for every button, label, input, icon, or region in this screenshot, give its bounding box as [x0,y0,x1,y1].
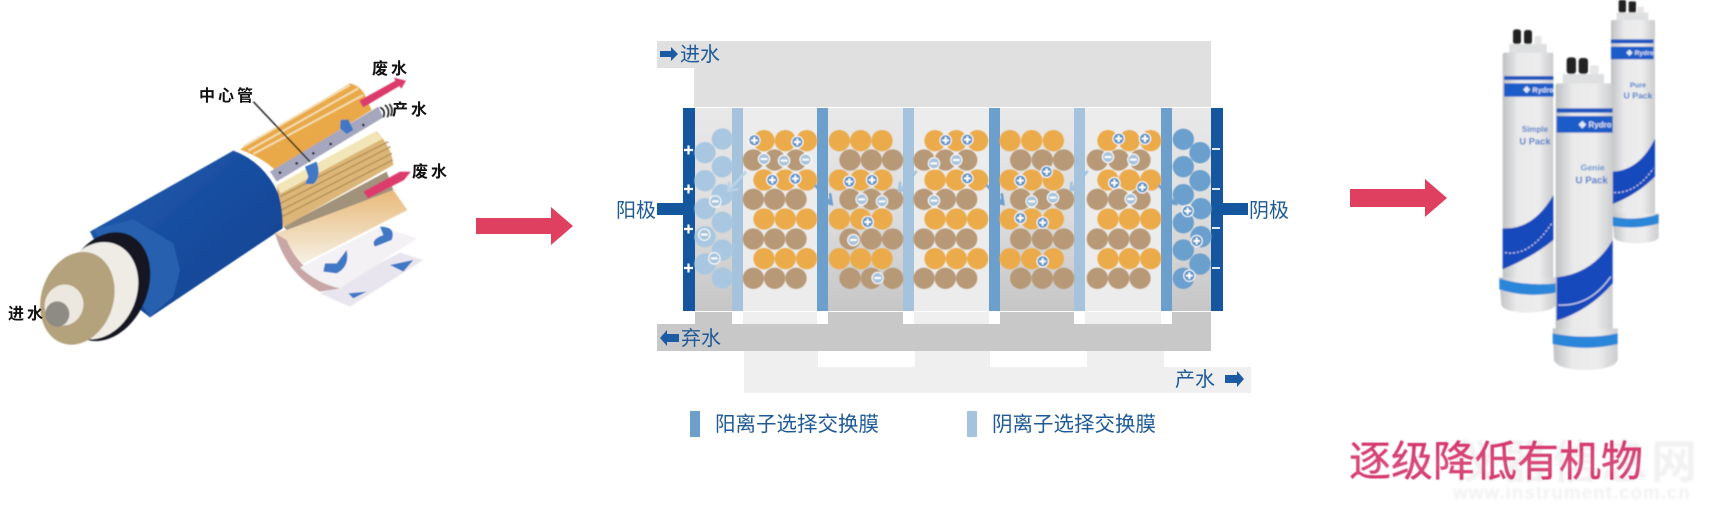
legend: anion membrane: 阴离子选择交换膜 [992,413,1156,436]
title: 逐级降低有机物: 逐级降低有机物 [1349,438,1643,485]
anode electrode [657,108,695,311]
text: 阳极: 阳极 [616,199,656,222]
product channel strips and band [743,312,1251,393]
label: 中心管: 中心管 [199,86,256,105]
anion ions [928,151,1139,207]
resin beads and ions, left half [694,128,939,289]
cartridge: left: ◆ Rydro [1523,85,1554,94]
cartridge: right [1611,0,1659,243]
illustration: spiral wound membrane cutaway [28,78,423,355]
cell compartments [695,108,1211,311]
inlet channel [657,41,1211,107]
text: 产水: 产水 [1175,368,1215,391]
label: 废水 lower: 废水 [412,162,450,181]
text: 进水: 进水 [680,43,720,66]
cartridge: left: U Pack [1519,136,1551,146]
membranes [732,108,1172,311]
icon: product arrow [1225,371,1244,387]
migration arrows [987,171,1176,204]
migration arrows [728,171,917,204]
product label group [1175,368,1244,391]
watermark: 仪器信息网 [1452,436,1697,488]
watermark: www.instrument.com.cn [1452,483,1690,504]
label: 产水: 产水 [392,101,430,119]
cartridge: center [1553,57,1618,370]
cation ions [749,135,878,228]
label: 废水 top: 废水 [372,59,410,78]
brown resin beads [743,149,903,289]
label: 进水: 进水 [8,305,46,323]
text: 阴极: 阴极 [1249,199,1289,222]
anode compartment beads [694,128,733,289]
arrow: red arrow to electrodeionization stack [476,207,573,245]
orange resin beads [753,130,893,269]
cartridge: right: U Pack [1624,91,1653,101]
cathode electrode [1211,108,1248,311]
cartridge: center: ◆ Rydro [1578,120,1612,129]
legend [690,411,1156,437]
cathode minus signs [1212,149,1220,268]
cartridge: right: Pure [1630,80,1646,89]
cartridge: right: ◆ Rydro [1626,49,1654,57]
panel: electrodeionization stack diagram [616,41,1289,437]
cartridge: left: Simple [1522,125,1549,134]
resin beads and ions, right half [913,129,1212,289]
panel: reverse osmosis membrane element [8,59,450,355]
orange resin beads [924,130,1161,269]
legend: cation membrane: 阳离子选择交换膜 [715,413,879,436]
cathode compartment beads [1173,129,1212,289]
drain channel strips and band [657,312,1211,351]
cartridge: center: Genie [1581,162,1605,172]
cartridge: left [1499,29,1556,313]
ion signs [701,137,937,278]
cation ions [940,133,1202,281]
arrow: red arrow to polishing cartridges [1350,179,1447,217]
panel: purification cartridges [1499,0,1659,370]
text: 弃水: 弃水 [681,327,721,350]
cartridge: center: U Pack [1576,175,1608,186]
icon: drain arrow [660,330,679,346]
drain label group [660,327,721,350]
anion ions [699,153,939,284]
anode plus signs [684,146,693,272]
ion signs [931,135,1200,279]
icon: inlet arrow [660,47,678,61]
brown resin beads [913,149,1151,289]
